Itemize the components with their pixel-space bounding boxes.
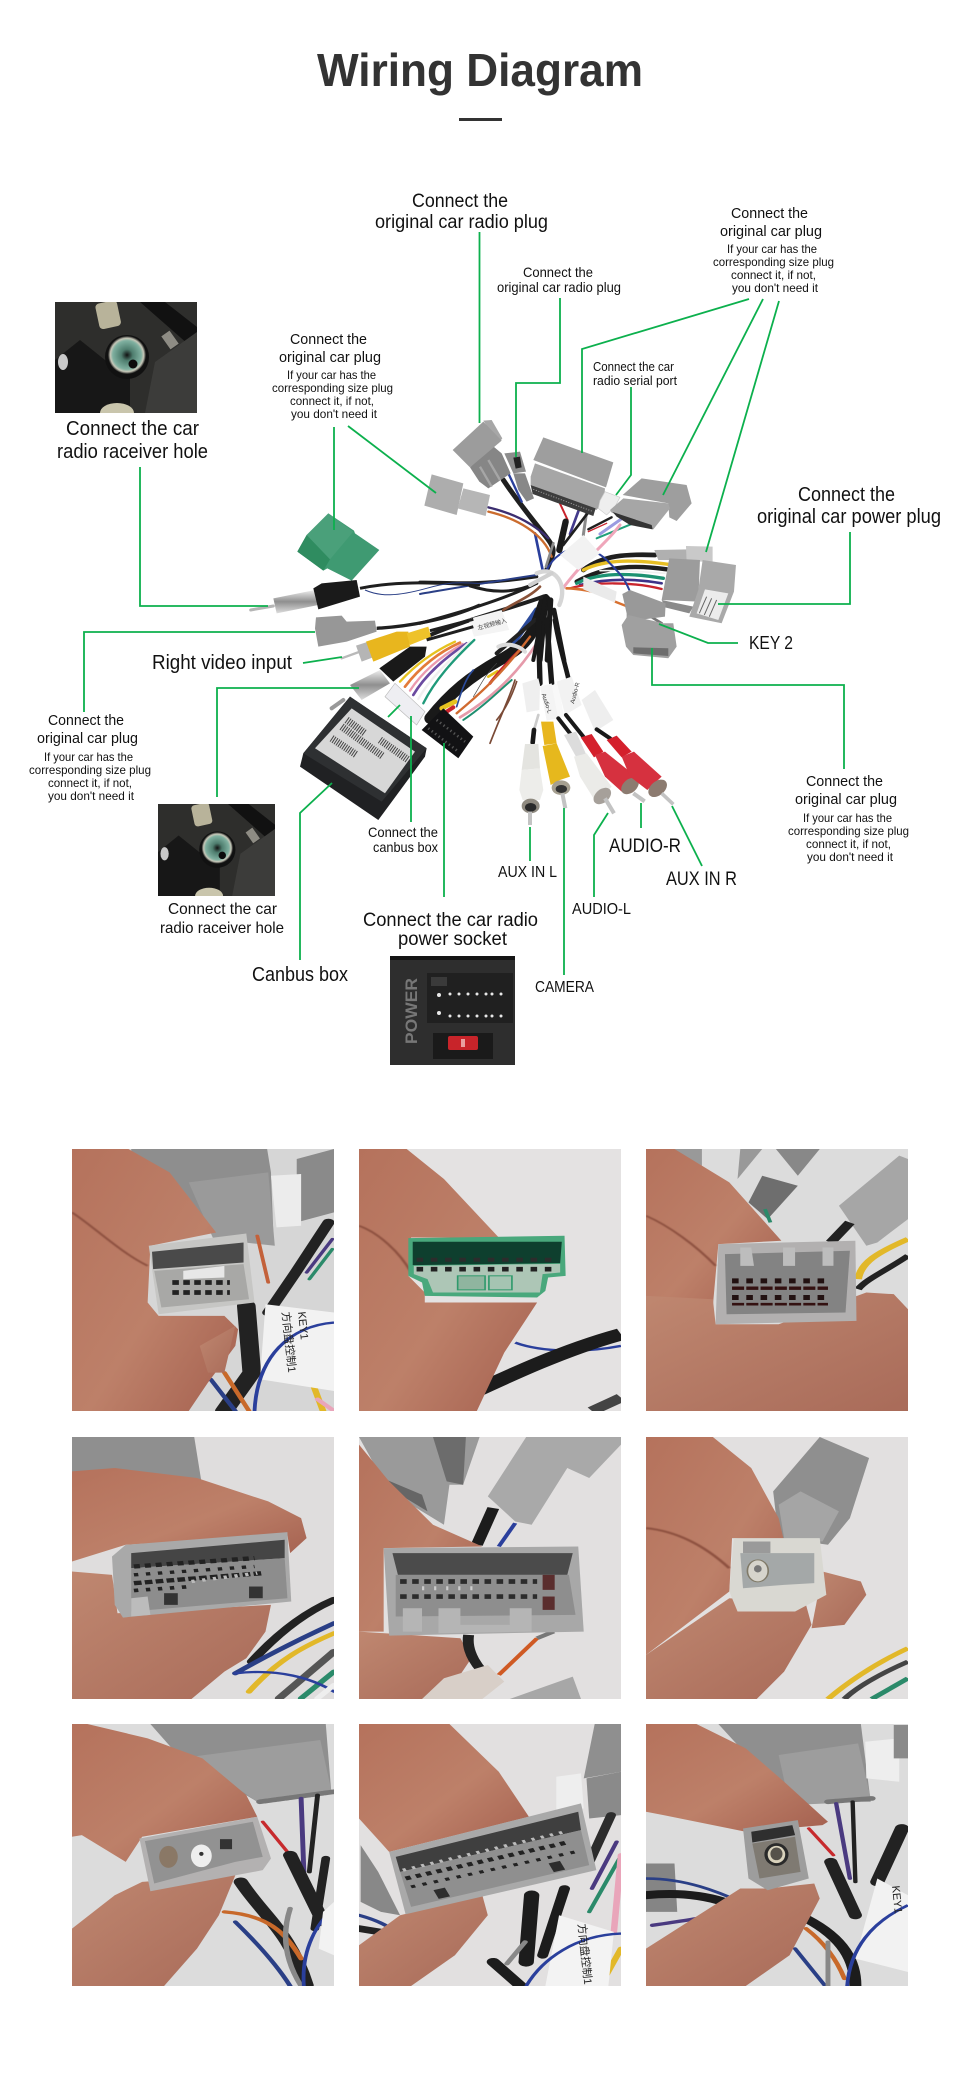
label: top right plug note: If your car has the (727, 242, 817, 256)
label: left plug note: corresponding size plug (272, 381, 393, 395)
wire tag text in photos (279, 1311, 904, 1985)
label: left plug note: connect it, if not, (290, 394, 374, 408)
photo grid (72, 1149, 908, 1986)
label: receiver hole lower: Connect the car (168, 901, 278, 918)
label: lower left plug note: connect it, if not, (48, 776, 132, 790)
label: top right plug note: corresponding size plug (713, 255, 834, 269)
label: power socket (363, 910, 538, 950)
label: right video input: Right video input (152, 652, 292, 674)
label: lower right plug note: corresponding size plug (788, 824, 909, 838)
label: connect canbus box: Connect the (368, 824, 438, 840)
canbus box (300, 697, 427, 820)
red plug audio R (581, 734, 645, 801)
label: receiver hole top (57, 418, 208, 463)
label: lower left plug note: original car plug (37, 730, 138, 747)
audio wire labels: Audio-L (540, 693, 552, 715)
black antenna plug lower (332, 647, 427, 708)
photo 8: wide connector angled (359, 1724, 621, 1986)
label: AUDIO-L: AUDIO-L (572, 901, 631, 918)
RCA plugs (519, 715, 673, 825)
narrow gray plug (504, 452, 534, 502)
label: lower left plug note: Connect the (48, 712, 124, 729)
photo 5: gray connector front (359, 1437, 621, 1699)
label: serial port: radio serial port (593, 373, 677, 388)
label: serial port: Connect the car (593, 359, 675, 374)
label: small radio plug: Connect the (523, 264, 593, 280)
label: lower left plug note (29, 712, 151, 803)
photo: receiver hole top (55, 302, 197, 413)
label: receiver hole lower (160, 901, 284, 937)
label: top radio plug: original car radio plug (375, 212, 548, 233)
label: lower right plug note: original car plug (795, 791, 897, 808)
label: lower right plug note (788, 773, 909, 864)
label: small radio plug: original car radio plug (497, 279, 621, 295)
wire labels (468, 535, 617, 637)
label: lower left plug note: If your car has the (44, 750, 133, 764)
gray plug lower left (315, 605, 480, 647)
white plug audio L (564, 732, 614, 813)
label: power socket: power socket (398, 929, 508, 950)
label: AUDIO-R: AUDIO-R (609, 836, 681, 857)
audio wire labels (522, 677, 613, 732)
label: top right plug note: Connect the (731, 205, 808, 222)
label: power plug: original car power plug (757, 506, 941, 528)
photo 1: silver connector (72, 1149, 334, 1411)
label: AUX IN L: AUX IN L (498, 864, 557, 881)
label: receiver hole top: radio raceiver hole (57, 441, 208, 463)
upper wire bundle (420, 473, 668, 660)
audio wire labels: Audio-R (570, 681, 582, 705)
label: connect canbus box (368, 824, 438, 855)
right gray plug (610, 478, 692, 529)
title underline (459, 118, 502, 121)
label: power plug: Connect the (798, 484, 895, 506)
label: canbus box: Canbus box (252, 964, 348, 986)
wiring harness diagram (251, 420, 736, 825)
main radio plug (531, 437, 613, 516)
label: connect canbus box: canbus box (373, 839, 438, 855)
yellow RCA left (342, 619, 473, 662)
label: serial port (593, 359, 677, 388)
photo 4: gray connector wide (72, 1437, 334, 1699)
white plug AUX L (519, 744, 543, 825)
photo: power socket (390, 956, 515, 1065)
label: receiver hole top: Connect the car (66, 418, 199, 440)
photo 7: connector with round pin (72, 1724, 334, 1986)
colour wire fan (400, 640, 474, 703)
lower black wires to RCA (473, 620, 568, 743)
wire labels: 左视频输入 (477, 616, 508, 632)
label: receiver hole lower: radio raceiver hole (160, 920, 284, 937)
wire tag text in photos: 方向盘控制1 (279, 1311, 299, 1373)
label: power plug (757, 484, 941, 528)
label: top right plug note: you don't need it (732, 281, 819, 295)
label: AUX IN R: AUX IN R (666, 869, 737, 890)
photo 9: small connector with pin (646, 1724, 908, 1986)
green plug (297, 513, 379, 581)
photo 2: green connector (359, 1149, 621, 1411)
yellow plug camera (541, 722, 570, 808)
label: left plug note: If your car has the (287, 368, 376, 382)
gray plug top (453, 420, 511, 488)
label: top radio plug: Connect the (412, 191, 508, 212)
label: KEY 2: KEY 2 (749, 633, 793, 653)
label: left plug note: original car plug (279, 349, 381, 366)
KEY 2 plug (622, 590, 677, 658)
white canbus plug (385, 683, 425, 725)
lower left wire bundle (430, 600, 545, 720)
label: top right plug note: original car plug (720, 223, 822, 240)
label: lower right plug note: you don't need it (807, 850, 894, 864)
wire tag text in photos: 方向盘控制1 (575, 1923, 595, 1985)
power plug (654, 546, 736, 623)
antenna plug upper (251, 580, 480, 613)
label: left plug note (272, 331, 393, 421)
label: top right plug note (713, 205, 834, 295)
callout lines (84, 232, 850, 975)
gray plug small left (424, 474, 490, 516)
label: left plug note: you don't need it (291, 407, 378, 421)
label: lower right plug note: Connect the (806, 773, 883, 790)
red plug AUX R (607, 736, 673, 804)
title: Wiring Diagram (317, 44, 643, 96)
photo: receiver hole lower (158, 804, 275, 896)
photo: power socket: POWER (402, 978, 421, 1044)
label: lower left plug note: corresponding size plug (29, 763, 151, 777)
label: lower right plug note: connect it, if not, (806, 837, 891, 851)
label: lower left plug note: you don't need it (48, 789, 135, 803)
label: lower right plug note: If your car has the (803, 811, 892, 825)
photo 6: white connector (646, 1437, 908, 1699)
label: power socket: Connect the car radio (363, 910, 538, 931)
label: CAMERA: CAMERA (535, 979, 594, 996)
black radio power plug (422, 708, 473, 758)
label: top radio plug (375, 191, 548, 233)
white serial port plug (598, 492, 620, 515)
label: left plug note: Connect the (290, 331, 367, 348)
label: top right plug note: connect it, if not, (731, 268, 816, 282)
wire tag text in photos: KEY1 (889, 1885, 904, 1914)
label: small radio plug (497, 264, 621, 295)
photo 3: gray connector (646, 1149, 908, 1411)
wire tag text in photos: KEY1 (295, 1311, 310, 1340)
